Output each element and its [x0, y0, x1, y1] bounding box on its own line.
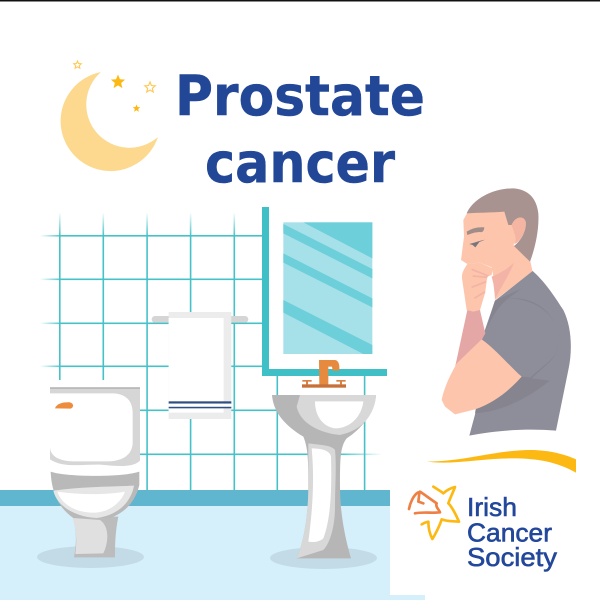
- icon: stars: [74, 61, 155, 112]
- towel and rail: [152, 312, 248, 419]
- logo wordmark: [467, 492, 557, 572]
- icon: daffodil: [409, 487, 459, 539]
- toilet: [50, 380, 140, 557]
- hand: [462, 263, 493, 312]
- basin: [315, 401, 363, 428]
- logo wordmark: Irish: [467, 492, 517, 522]
- tile grid: [40, 213, 382, 490]
- shirt folds: [475, 288, 559, 413]
- sink body: [272, 395, 376, 558]
- logo wordmark: Society: [467, 542, 557, 572]
- toilet bowl: [51, 472, 139, 518]
- toilet shadow: [37, 546, 144, 568]
- shirt: [469, 271, 571, 436]
- faucet: [302, 360, 346, 388]
- ear: [512, 218, 526, 244]
- pedestal highlight: [297, 443, 336, 558]
- logo wordmark: Cancer: [467, 518, 552, 548]
- icon: crescent moon: [61, 72, 158, 171]
- hair: [467, 188, 538, 262]
- floor: [0, 506, 425, 600]
- flush button: [55, 402, 73, 409]
- toilet pedestal: [73, 517, 118, 557]
- title: cancer: [205, 131, 395, 195]
- face and neck: [461, 203, 537, 300]
- forearm: [455, 310, 485, 367]
- toilet tank: [50, 387, 140, 466]
- mirror: [283, 222, 372, 354]
- wall bar: [262, 207, 387, 376]
- baseboard: [0, 490, 390, 506]
- upper arm: [442, 339, 522, 414]
- title: Prostate: [175, 64, 425, 128]
- eyebrow: [467, 227, 484, 235]
- logo: Irish Cancer Society: [409, 487, 557, 572]
- title: [175, 64, 425, 195]
- yellow swoosh: [427, 450, 576, 473]
- eye: [469, 240, 485, 247]
- sink: [272, 395, 376, 558]
- tank front: [50, 393, 133, 461]
- man thinking: [442, 188, 571, 436]
- sink shadow: [270, 547, 377, 569]
- seat lid: [50, 465, 140, 476]
